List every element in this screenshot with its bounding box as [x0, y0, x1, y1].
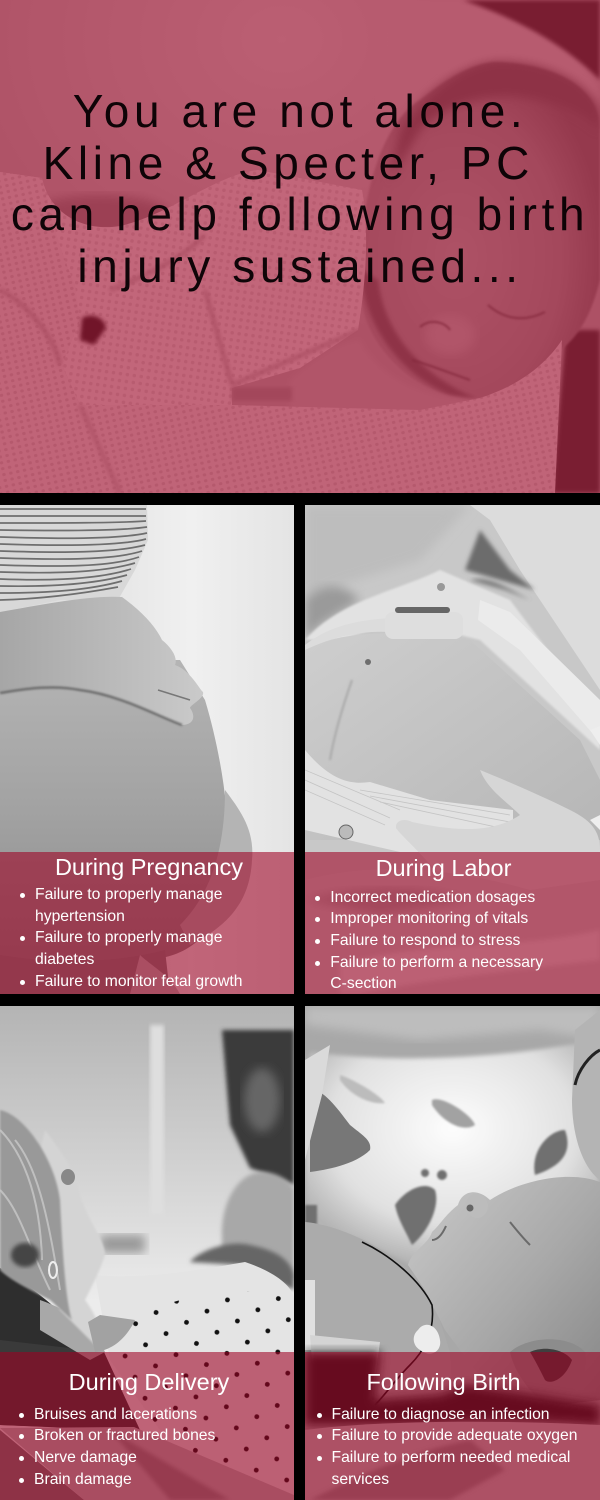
monitor sash [478, 600, 600, 742]
lower dark area [305, 1352, 600, 1425]
bullet list [315, 888, 543, 992]
hand [310, 1090, 370, 1172]
title: You are not alone. [73, 85, 527, 137]
upper hand [0, 597, 203, 725]
bullet list: Nerve damage [34, 1449, 137, 1466]
seat [0, 1268, 120, 1430]
title: Kline & Specter, PC [43, 137, 534, 189]
heading: During Labor [376, 855, 511, 881]
overlay band [305, 852, 600, 994]
bullet list: Bruises and lacerations [34, 1406, 197, 1422]
monitor device [305, 583, 463, 650]
lower hand [180, 790, 252, 945]
bullet list: Failure to provide adequate oxygen [332, 1427, 577, 1444]
bullet list: services [332, 1471, 389, 1488]
panel: during labor [305, 505, 600, 994]
panel: hero photo with title [0, 0, 600, 493]
bullet list: Incorrect medication dosages [330, 888, 535, 906]
title: can help following birth [11, 188, 589, 240]
belly [0, 660, 228, 962]
bullet list: Failure to respond to stress [330, 932, 520, 949]
overlay band [0, 852, 294, 994]
bullet list [20, 886, 243, 990]
bullet list: Improper monitoring of vitals [330, 910, 528, 927]
bullet list: hypertension [35, 908, 125, 925]
heading: Following Birth [366, 1369, 521, 1395]
bullet list: Broken or fractured bones [34, 1427, 215, 1444]
belly [305, 633, 600, 840]
photo: newborn with monitoring wires [305, 1006, 600, 1500]
dark picture [222, 1030, 294, 1185]
dark gap [465, 530, 535, 590]
neck wrap [290, 340, 480, 420]
bullet list: Failure to properly manage [35, 929, 222, 946]
waffle blanket [0, 170, 562, 493]
title: injury sustained... [77, 240, 523, 292]
bullet list: Failure to properly manage [35, 886, 222, 903]
adult arm [572, 1010, 600, 1180]
bullet list: diabetes [35, 951, 94, 968]
overlay band [0, 1352, 294, 1500]
hair [0, 1110, 72, 1320]
pillow [222, 1172, 294, 1280]
panel: during delivery [0, 1006, 294, 1500]
bullet list: Failure to diagnose an infection [332, 1406, 550, 1422]
ear [510, 1339, 586, 1410]
patterned blanket [305, 1042, 600, 1270]
hand [396, 770, 600, 890]
shoulder [40, 1300, 105, 1360]
footprints [305, 1075, 567, 1245]
baby head [360, 62, 600, 399]
overlay: rose tint [0, 0, 600, 493]
title [11, 85, 589, 292]
bullet list: Brain damage [34, 1471, 132, 1488]
bullet list [19, 1406, 215, 1488]
bullet list: Failure to perform needed medical [332, 1449, 570, 1466]
bullet list: Failure to monitor fetal growth [35, 973, 243, 990]
dress [95, 1262, 294, 1500]
snap [339, 825, 353, 839]
bullet list: Failure to perform a necessary [330, 954, 543, 971]
baby head [408, 1177, 600, 1405]
overlay band [305, 1352, 600, 1500]
panel: during pregnancy [0, 505, 294, 994]
photo: sleeping newborn in waffle blanket [0, 0, 600, 493]
heading: During Delivery [69, 1369, 229, 1395]
panel: following birth [305, 1006, 600, 1500]
striped shirt [0, 505, 148, 612]
torso [305, 1222, 460, 1500]
face and neck [20, 1130, 105, 1345]
wire and electrode [362, 1242, 433, 1405]
photo: fetal monitor belts on belly [305, 505, 600, 994]
bullet list: C-section [330, 975, 397, 992]
photo: woman lying in hospital bed [0, 1006, 294, 1500]
bullet list [317, 1406, 577, 1488]
lower belt [305, 750, 513, 852]
heading: During Pregnancy [55, 854, 243, 880]
photo: hands on pregnant belly [0, 505, 294, 994]
